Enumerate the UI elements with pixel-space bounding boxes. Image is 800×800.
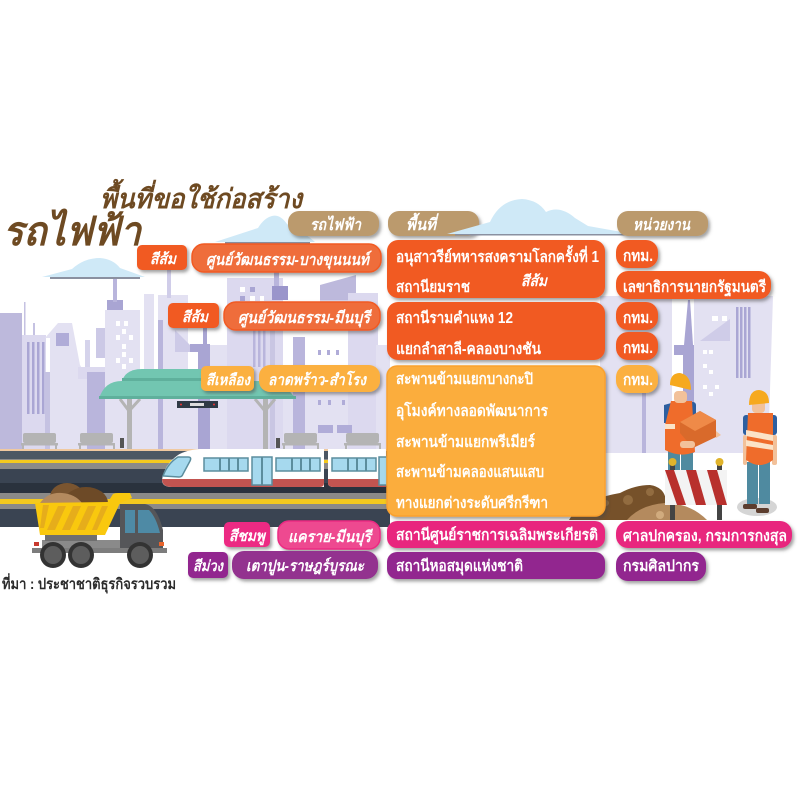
- agency: BMA row 2: [616, 302, 658, 330]
- benches: [21, 433, 381, 450]
- title: รถไฟฟ้า: [3, 208, 142, 254]
- left mid windows: [116, 321, 133, 369]
- yellow line name: ลาดพร้าว-สำโรง: [268, 370, 367, 389]
- yellow line areas panel: อุโมงค์ทางลอดพัฒนาการ: [396, 401, 549, 421]
- purple line name: [232, 551, 378, 579]
- column header: train line: [288, 211, 379, 236]
- yellow line areas panel: สะพานข้ามแยกพรีเมียร์: [396, 433, 536, 451]
- yellow line areas panel: สะพานข้ามคลองแสนแสบ: [396, 463, 544, 481]
- title: [3, 178, 305, 254]
- column header: agency: [617, 211, 708, 236]
- agency: BMA row 3: กทม.: [623, 340, 653, 357]
- purple line tag: [188, 552, 228, 578]
- agency: cabinet secretariat: [616, 271, 771, 299]
- railway tracks: [0, 449, 390, 527]
- purple line agency: [616, 552, 706, 581]
- purple line agency: กรมศิลปากร: [623, 557, 700, 575]
- worker standing: [737, 390, 777, 516]
- orange line 1 name: [192, 244, 381, 272]
- purple line name: เตาปูน-ราษฎร์บูรณะ: [246, 557, 365, 576]
- orange line 1 name: ศูนย์วัฒนธรรม-บางขุนนนท์: [206, 250, 372, 270]
- pink line tag: [224, 522, 270, 547]
- purple line tag: สีม่วง: [193, 558, 224, 575]
- orange line 2 areas panel: สถานีรามคำแหง 12: [396, 309, 513, 327]
- station sign: [177, 401, 218, 408]
- orange line 1 areas panel: สถานียมราช: [396, 278, 470, 296]
- agency: BMA yellow: กทม.: [623, 372, 653, 389]
- pink line area: สถานีศูนย์ราชการเฉลิมพระเกียรติ: [396, 526, 598, 546]
- agency: BMA row 1: [616, 240, 658, 268]
- source note: ที่มา : ประชาชาติธุรกิจรวบรวม: [2, 573, 176, 594]
- orange line 1 areas panel: [387, 240, 605, 298]
- agency: BMA row 2: กทม.: [623, 310, 653, 327]
- orange line 1 areas panel: สีส้ม: [521, 273, 548, 290]
- city skyline background: [0, 270, 773, 453]
- purple line area: [387, 552, 605, 579]
- agency: BMA row 1: กทม.: [623, 248, 653, 265]
- orange line 1 tag: [137, 245, 187, 270]
- clouds: [42, 216, 315, 279]
- dirt piles and barrier: [569, 458, 727, 520]
- orange line 2 tag: สีส้ม: [182, 309, 209, 326]
- dump truck: [32, 483, 167, 568]
- right skyline: [600, 296, 672, 453]
- pink line name: [278, 521, 380, 549]
- pink line agency: [616, 521, 792, 548]
- worker carrying bricks: [664, 373, 721, 474]
- agency: BMA row 3: [616, 332, 658, 360]
- orange line 1 areas panel: อนุสาวรีย์ทหารสงครามโลกครั้งที่ 1: [396, 245, 599, 267]
- orange line 2 areas panel: แยกลำสาลี-คลองบางชัน: [396, 340, 541, 358]
- agency: cabinet secretariat: เลขาธิการนายกรัฐมนตรี: [623, 278, 767, 297]
- column header: train line: รถไฟฟ้า: [310, 215, 362, 234]
- pink line tag: สีชมพู: [229, 528, 267, 546]
- orange line 2 name: [224, 302, 380, 330]
- train: [162, 449, 387, 487]
- pink line agency: ศาลปกครอง, กรมการกงสุล: [623, 528, 787, 546]
- yellow line areas panel: สะพานข้ามแยกบางกะปิ: [396, 370, 533, 388]
- yellow line tag: สีเหลือง: [206, 372, 251, 389]
- yellow line name: [259, 365, 380, 392]
- orange line 2 name: ศูนย์วัฒนธรรม-มีนบุรี: [238, 308, 373, 328]
- cloud over area header: [447, 199, 633, 236]
- yellow line tag: [201, 366, 254, 391]
- title: พื้นที่ขอใช้ก่อสร้าง: [100, 178, 305, 214]
- yellow line areas panel: ทางแยกต่างระดับศรีกรีฑา: [396, 494, 548, 512]
- agency: BMA yellow: [616, 365, 658, 393]
- pink line area: [387, 521, 605, 548]
- orange line 2 tag: [168, 303, 219, 328]
- purple line area: สถานีหอสมุดแห่งชาติ: [396, 557, 523, 576]
- pink line name: แคราย-มีนบุรี: [288, 528, 374, 547]
- orange line 2 areas panel: [387, 302, 605, 360]
- column header: area: [388, 211, 479, 236]
- yellow line areas panel: [387, 366, 605, 516]
- column header: agency: หน่วยงาน: [633, 217, 691, 234]
- column header: area: พื้นที่: [406, 212, 440, 234]
- orange line 1 tag: สีส้ม: [150, 251, 177, 268]
- station platform and shelter: [21, 369, 381, 450]
